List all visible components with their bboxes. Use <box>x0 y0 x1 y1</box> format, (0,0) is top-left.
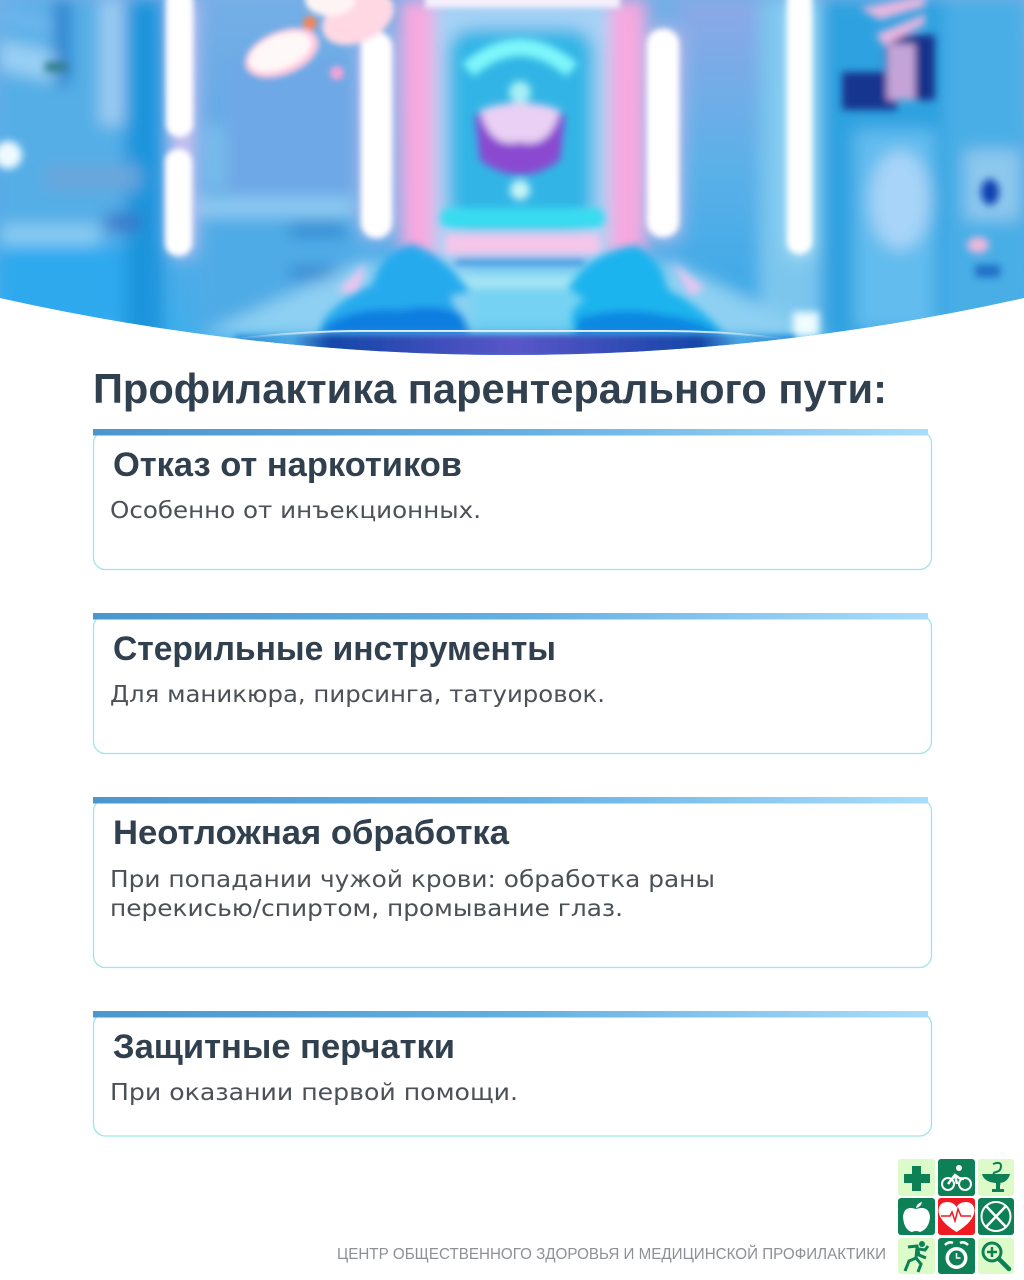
icon: no smoking <box>978 1198 1014 1235</box>
dark wall unit <box>0 0 1000 277</box>
card heading: Отказ от наркотиков <box>113 446 462 484</box>
icon: medical cross <box>898 1159 935 1196</box>
icon: alarm clock <box>938 1238 975 1274</box>
card text: Особенно от инъекционных. <box>110 496 481 524</box>
center device <box>338 48 819 336</box>
panel: неотложная обработка <box>93 797 932 968</box>
lights <box>165 0 812 256</box>
card heading: Защитные перчатки <box>113 1028 455 1066</box>
card heading: Стерильные инструменты <box>113 630 556 668</box>
icon: apple <box>898 1198 935 1235</box>
logo: health icon grid <box>898 1159 1014 1274</box>
card heading: Неотложная обработка <box>113 814 510 852</box>
icon: heart with pulse <box>938 1198 975 1235</box>
icon: bowl of hygieia <box>978 1159 1014 1196</box>
card text <box>110 865 715 922</box>
title: Профилактика парентерального пути: <box>93 365 887 412</box>
icon: runner <box>898 1238 935 1274</box>
icon: magnifier <box>978 1238 1014 1274</box>
panel: отказ от наркотиков <box>93 429 932 570</box>
gloves <box>320 244 724 336</box>
tray <box>228 331 795 358</box>
hero photo: blurred operating room <box>0 0 1024 360</box>
card text: перекисью/спиртом, промывание глаз. <box>110 894 623 922</box>
footer organisation name: ЦЕНТР ОБЩЕСТВЕННОГО ЗДОРОВЬЯ И МЕДИЦИНСКОЙ ПРОФИЛАКТИКИ <box>337 1244 886 1263</box>
panel: стерильные инструменты <box>93 613 932 754</box>
light glow <box>172 0 810 255</box>
card text: При оказании первой помощи. <box>110 1078 518 1106</box>
card text: Для маникюра, пирсинга, татуировок. <box>110 680 605 708</box>
icon: cyclist <box>938 1159 975 1196</box>
card text: При попадании чужой крови: обработка раны <box>110 865 715 893</box>
panel: защитные перчатки <box>93 1011 932 1136</box>
